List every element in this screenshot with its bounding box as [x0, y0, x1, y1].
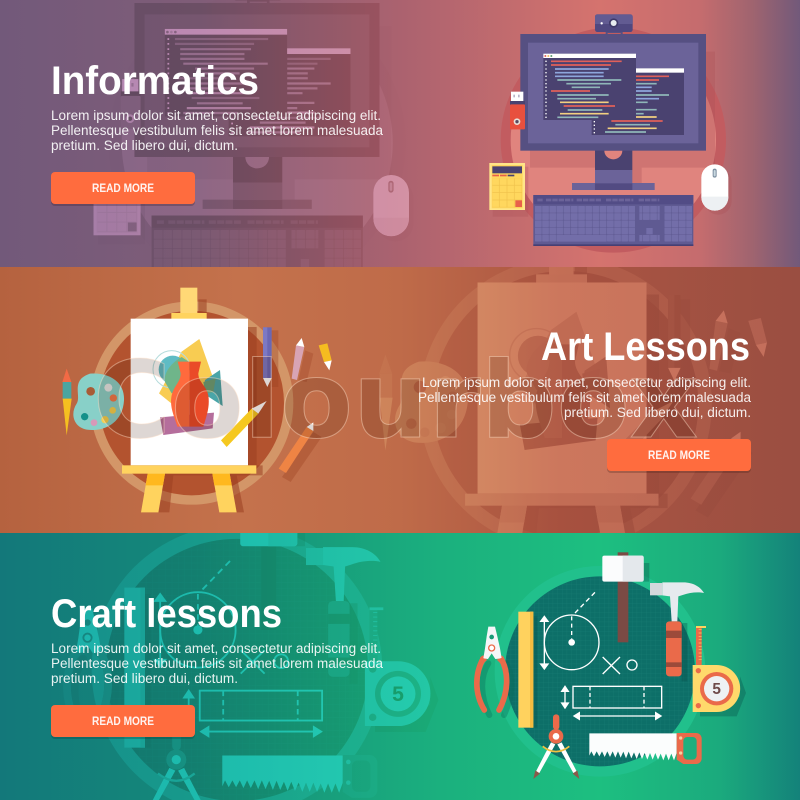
ghost illustration: easel	[380, 267, 767, 533]
icon: compass	[533, 714, 579, 779]
code window front	[543, 54, 636, 120]
blueprint drawing: rectangle	[562, 686, 662, 719]
button: read more: READ MORE	[92, 716, 154, 728]
heading: Art Lessons: Art Lessons	[541, 325, 750, 369]
code window back	[592, 68, 684, 135]
text block: informatics description: Lorem ipsum dolor sit amet, consectetur adipiscing elit.	[51, 108, 381, 123]
ghost illustration: tools	[67, 506, 438, 800]
panel 1 background	[0, 0, 800, 267]
text block: craft description: Lorem ipsum dolor sit amet, consectetur adipiscing elit.	[51, 641, 381, 656]
illustration: easel and pencils	[62, 288, 332, 512]
icon: palette	[73, 373, 124, 430]
icon: yellow pencil stub	[319, 343, 332, 370]
monitor shadow	[530, 52, 715, 190]
button: read more: READ MORE	[648, 450, 710, 462]
icon: usb stick	[510, 92, 525, 129]
panel: informatics	[0, 0, 800, 292]
illustration: tools	[477, 552, 746, 779]
icon: long yellow pencil	[221, 401, 267, 447]
icon: pink pencil	[292, 338, 313, 382]
easel ledge	[122, 465, 256, 474]
icon: tape measure: 5	[712, 681, 721, 698]
heading: Informatics: Informatics	[51, 59, 259, 103]
text block: craft description: Pellentesque vestibulum felis sit amet lorem malesuada	[51, 656, 383, 671]
panel: craft lessons	[0, 506, 800, 800]
text block: informatics description	[51, 108, 383, 153]
icon: ruler	[518, 612, 533, 728]
monitor stand	[572, 150, 655, 190]
panel 2 background	[0, 267, 800, 533]
illustration: computer desk	[489, 14, 732, 253]
canvas	[131, 319, 248, 465]
button: read more	[51, 705, 195, 739]
icon: claw hammer	[650, 582, 704, 676]
button: read more	[51, 172, 195, 206]
icon: pliers	[477, 627, 511, 715]
icon: orange pencil	[279, 422, 322, 482]
panel 3 background	[0, 533, 800, 800]
heading: Craft lessons: Craft lessons	[51, 592, 282, 636]
blueprint drawing: cross and circle	[603, 657, 637, 674]
button: read more	[607, 439, 751, 473]
desk circle	[501, 27, 726, 253]
icon: calculator	[489, 163, 528, 217]
monitor	[520, 34, 706, 151]
icon: mallet	[602, 552, 644, 642]
text block: art description	[418, 375, 751, 420]
easel legs	[141, 474, 237, 512]
button: read more: READ MORE	[92, 183, 154, 195]
text block: art description: Pellentesque vestibulum felis sit amet lorem malesuada	[418, 390, 751, 405]
icon: saw	[589, 733, 702, 764]
easel top clamp	[171, 288, 207, 326]
text block: craft description: pretium. Sed libero dui, dictum.	[51, 671, 238, 686]
text block: art description: Lorem ipsum dolor sit amet, consectetur adipiscing elit.	[422, 375, 751, 390]
tool shadows	[533, 563, 746, 728]
webcam	[595, 14, 633, 39]
icon: keyboard	[533, 195, 693, 246]
text block: art description: pretium. Sed libero dui, dictum.	[564, 405, 751, 420]
easel shadows	[159, 299, 263, 512]
icon: paint brush	[62, 369, 72, 435]
icon: tape measure	[693, 626, 740, 712]
text block: informatics description: Pellentesque vestibulum felis sit amet lorem malesuada	[51, 123, 383, 138]
painting: still life	[153, 339, 223, 435]
panel: art lessons	[0, 267, 800, 533]
icon: mouse	[701, 164, 732, 215]
easel circle	[90, 301, 293, 505]
text block: craft description	[51, 641, 383, 686]
ghost illustration: computer	[94, 0, 413, 292]
watermark: Colourbox: Colourbox	[93, 339, 698, 462]
text block: informatics description: pretium. Sed libero dui, dictum.	[51, 138, 238, 153]
blueprint drawing: circle	[541, 592, 599, 670]
icon: blue pencil	[263, 327, 278, 387]
blueprint circle	[495, 566, 705, 777]
